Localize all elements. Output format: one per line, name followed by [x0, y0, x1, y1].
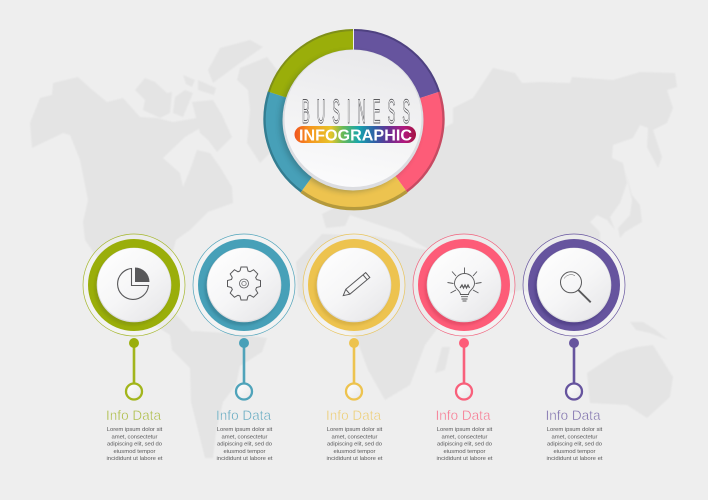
- body text: incididunt ut labore et: [326, 456, 383, 462]
- map: Greenland: [208, 40, 285, 163]
- infographic canvas: [31, 29, 676, 460]
- icon: pie chart: [118, 268, 150, 299]
- connector pin: [236, 338, 252, 400]
- ring segment: purple: [354, 30, 439, 120]
- body text: adipiscing elit, sed do: [437, 442, 493, 448]
- title: BUSINESS: BUSINESS: [302, 94, 410, 131]
- map: Africa: [296, 234, 456, 400]
- body text: incididunt ut labore et: [106, 456, 163, 462]
- body text: [326, 427, 383, 462]
- body text: adipiscing elit, sed do: [327, 442, 383, 448]
- ring segment: yellow: [301, 120, 407, 209]
- ring badge: [83, 234, 185, 336]
- body text: eiusmod tempor: [444, 449, 486, 455]
- ring badge: [523, 234, 625, 336]
- heading: Info Data: [106, 407, 161, 423]
- body text: Lorem ipsum dolor sit: [107, 427, 163, 433]
- world map: [30, 40, 677, 458]
- heading: Info Data: [436, 407, 491, 423]
- body text: amet, consectetur: [112, 434, 158, 440]
- icon: pencil: [341, 273, 370, 298]
- map: North and Central America: [30, 77, 233, 335]
- map: Eurasia: [322, 68, 677, 320]
- map: New Guinea: [630, 322, 668, 340]
- body text: Lorem ipsum dolor sit: [437, 427, 493, 433]
- body text: [546, 427, 603, 462]
- icon: light bulb: [448, 268, 482, 301]
- body text: incididunt ut labore et: [216, 456, 273, 462]
- title: INFOGRAPHIC pill: INFOGRAPHIC: [299, 128, 412, 144]
- icon: gear: [228, 267, 260, 300]
- ring badge: [193, 234, 295, 336]
- body text: Lorem ipsum dolor sit: [327, 427, 383, 433]
- body text: amet, consectetur: [222, 434, 268, 440]
- connector pin: [566, 338, 582, 400]
- body text: eiusmod tempor: [224, 449, 266, 455]
- step 2: teal: [193, 234, 295, 462]
- body text: incididunt ut labore et: [436, 456, 493, 462]
- main ring chart: [265, 30, 443, 209]
- ring segment: teal: [265, 92, 354, 192]
- body text: [106, 427, 163, 462]
- ring badge: [413, 234, 515, 336]
- body text: [436, 427, 493, 462]
- ring segment: pink: [354, 92, 443, 192]
- body text: Lorem ipsum dolor sit: [217, 427, 273, 433]
- body text: amet, consectetur: [442, 434, 488, 440]
- body text: Lorem ipsum dolor sit: [547, 427, 603, 433]
- icon: magnifier: [560, 272, 591, 302]
- body text: eiusmod tempor: [114, 449, 156, 455]
- ring segment: green: [269, 30, 354, 120]
- heading: Info Data: [216, 407, 271, 423]
- ring inner shadow: [280, 52, 420, 192]
- body text: eiusmod tempor: [334, 449, 376, 455]
- step 3: yellow: [303, 234, 405, 462]
- center disc: [282, 50, 424, 190]
- step 5: purple: [523, 234, 625, 462]
- map: Arctic islands: [135, 75, 232, 152]
- body text: eiusmod tempor: [554, 449, 596, 455]
- body text: amet, consectetur: [552, 434, 598, 440]
- ring badge: [303, 234, 405, 336]
- map: Australia: [587, 345, 673, 418]
- body text: [216, 427, 273, 462]
- body text: amet, consectetur: [332, 434, 378, 440]
- body text: incididunt ut labore et: [546, 456, 603, 462]
- heading: Info Data: [546, 407, 601, 423]
- connector pin: [126, 338, 142, 400]
- map: Japan: [618, 170, 642, 238]
- step 4: pink: [413, 234, 515, 462]
- heading: Info Data: [326, 407, 381, 423]
- body text: adipiscing elit, sed do: [547, 442, 603, 448]
- connector pin: [346, 338, 362, 400]
- body text: adipiscing elit, sed do: [217, 442, 273, 448]
- map: South America: [170, 331, 267, 458]
- map: Madagascar: [435, 347, 450, 373]
- step 1: green: [83, 234, 185, 462]
- body text: adipiscing elit, sed do: [107, 442, 163, 448]
- connector pin: [456, 338, 472, 400]
